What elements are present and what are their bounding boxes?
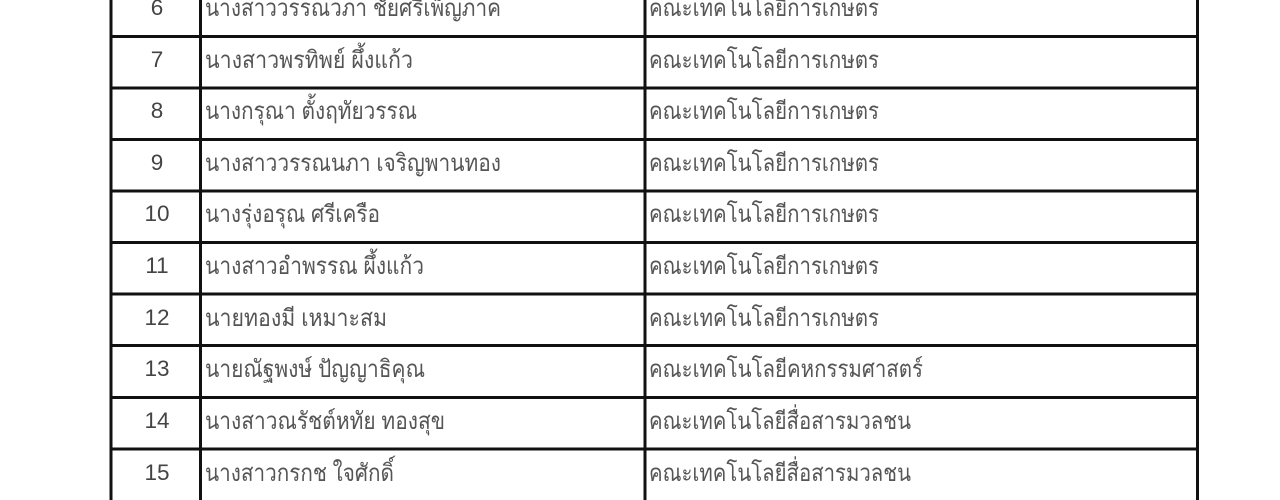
row 11: คณะเทคโนโลยีการเกษตร bbox=[649, 252, 879, 280]
row 13: คณะเทคโนโลยีคหกรรมศาสตร์ bbox=[649, 355, 923, 383]
row 14: คณะเทคโนโลยีสื่อสารมวลชน bbox=[649, 404, 911, 435]
row 13 bbox=[144, 355, 923, 384]
row 13: 13 bbox=[144, 356, 170, 381]
row 8 bbox=[151, 93, 879, 126]
row 8: คณะเทคโนโลยีการเกษตร bbox=[649, 97, 879, 125]
row 14: 14 bbox=[144, 408, 170, 433]
row 10: 10 bbox=[144, 201, 170, 226]
row 9: นางสาววรรณนภา เจริญพานทอง bbox=[205, 150, 501, 177]
row 14 bbox=[144, 404, 911, 436]
row 10 bbox=[144, 200, 879, 229]
row 12: 12 bbox=[144, 305, 170, 330]
row 12: คณะเทคโนโลยีการเกษตร bbox=[649, 304, 879, 332]
row 9: 9 bbox=[151, 150, 163, 175]
row 7: คณะเทคโนโลยีการเกษตร bbox=[649, 46, 879, 74]
row 10: คณะเทคโนโลยีการเกษตร bbox=[649, 200, 879, 228]
row 15: คณะเทคโนโลยีสื่อสารมวลชน bbox=[649, 456, 911, 487]
row 9: คณะเทคโนโลยีการเกษตร bbox=[649, 149, 879, 177]
row 8: นางกรุณา ตั้งฤทัยวรรณ bbox=[205, 93, 417, 126]
row 7: นางสาวพรทิพย์ ผึ้งแก้ว bbox=[205, 42, 413, 74]
row 13: นายณัฐพงษ์ ปัญญาธิคุณ bbox=[205, 355, 425, 384]
row 11 bbox=[145, 248, 879, 280]
row 12: นายทองมี เหมาะสม bbox=[205, 305, 387, 332]
row 11: นางสาวอำพรรณ ผึ้งแก้ว bbox=[205, 248, 424, 280]
row 10: นางรุ่งอรุณ ศรีเครือ bbox=[205, 201, 380, 229]
row 11: 11 bbox=[145, 253, 169, 278]
row 15: 15 bbox=[144, 460, 170, 485]
row 6 bbox=[151, 0, 879, 22]
row 9 bbox=[151, 149, 879, 177]
row 12 bbox=[144, 304, 879, 332]
row 7: 7 bbox=[151, 47, 163, 72]
row 14: นางสาวณรัชต์หทัย ทองสุข bbox=[205, 407, 445, 436]
row 15 bbox=[144, 455, 911, 487]
row 15: นางสาวกรกช ใจศักดิ์ bbox=[205, 455, 396, 487]
row 7 bbox=[151, 42, 879, 74]
row 8: 8 bbox=[151, 98, 163, 123]
